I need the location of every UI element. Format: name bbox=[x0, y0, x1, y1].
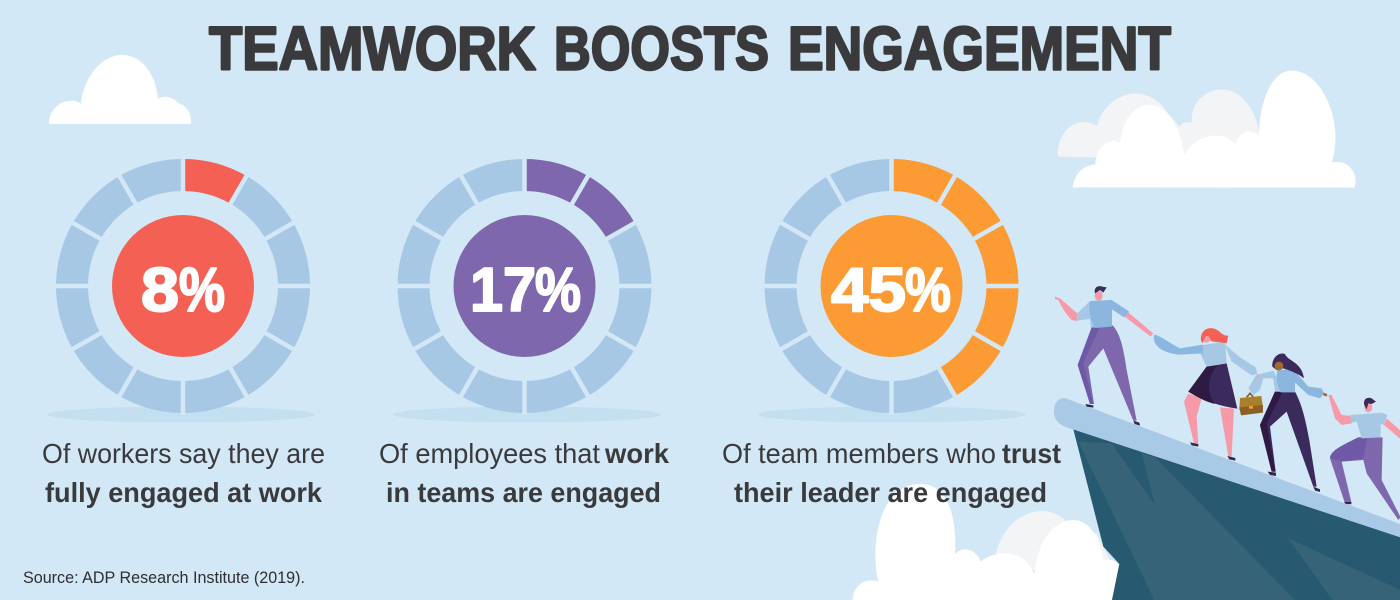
donut chart: 45%: 45 bbox=[831, 256, 906, 325]
donut shadow bbox=[47, 406, 315, 422]
title bbox=[209, 14, 1171, 82]
cliff bbox=[1073, 429, 1400, 600]
cliff top ledge bbox=[1054, 398, 1400, 538]
cloud: top left bbox=[49, 55, 191, 124]
figure: man at rear bbox=[1256, 373, 1400, 520]
cloud: bottom bbox=[853, 484, 1119, 600]
title: TEAMWORK bbox=[209, 14, 536, 82]
donut chart: 17%: 17 bbox=[470, 256, 536, 325]
caption: fully engaged at work bbox=[45, 477, 322, 508]
caption: Of team members who bbox=[722, 438, 996, 469]
donut chart: 17%: % bbox=[535, 256, 581, 325]
caption bbox=[722, 438, 1061, 508]
panel: 8% fully engaged bbox=[42, 157, 325, 508]
donut chart: 8% bbox=[54, 157, 312, 415]
caption: their leader are engaged bbox=[734, 477, 1047, 508]
panel: 17% teams bbox=[379, 157, 669, 508]
caption: trust bbox=[1002, 438, 1061, 469]
source note: Source: ADP Research Institute (2019). bbox=[23, 568, 305, 587]
illustration: team climbing cliff bbox=[1054, 286, 1400, 600]
caption: Of employees that bbox=[379, 438, 600, 469]
caption: in teams are engaged bbox=[386, 477, 661, 508]
panel: 45% trust bbox=[722, 157, 1061, 508]
caption: work bbox=[604, 438, 669, 469]
caption bbox=[42, 438, 325, 508]
figure: man leading bbox=[1055, 286, 1153, 426]
title: BOOSTS bbox=[554, 14, 769, 82]
title: ENGAGEMENT bbox=[788, 14, 1171, 82]
figure: woman with dark curly hair bbox=[1248, 354, 1324, 492]
donut shadow bbox=[393, 406, 661, 422]
donut chart: 8%: % bbox=[179, 256, 225, 325]
donut chart: 8%: 8 bbox=[141, 256, 179, 325]
cloud: top right bbox=[1058, 71, 1356, 188]
donut chart: 45% bbox=[762, 157, 1020, 415]
figure: woman with red hair bbox=[1154, 328, 1257, 461]
caption: Of workers say they are bbox=[42, 438, 325, 469]
caption bbox=[379, 438, 669, 508]
donut chart: 45%: % bbox=[905, 256, 951, 325]
icon: briefcase bbox=[1239, 393, 1263, 415]
donut chart: 17% bbox=[396, 157, 654, 415]
donut shadow bbox=[758, 406, 1026, 422]
